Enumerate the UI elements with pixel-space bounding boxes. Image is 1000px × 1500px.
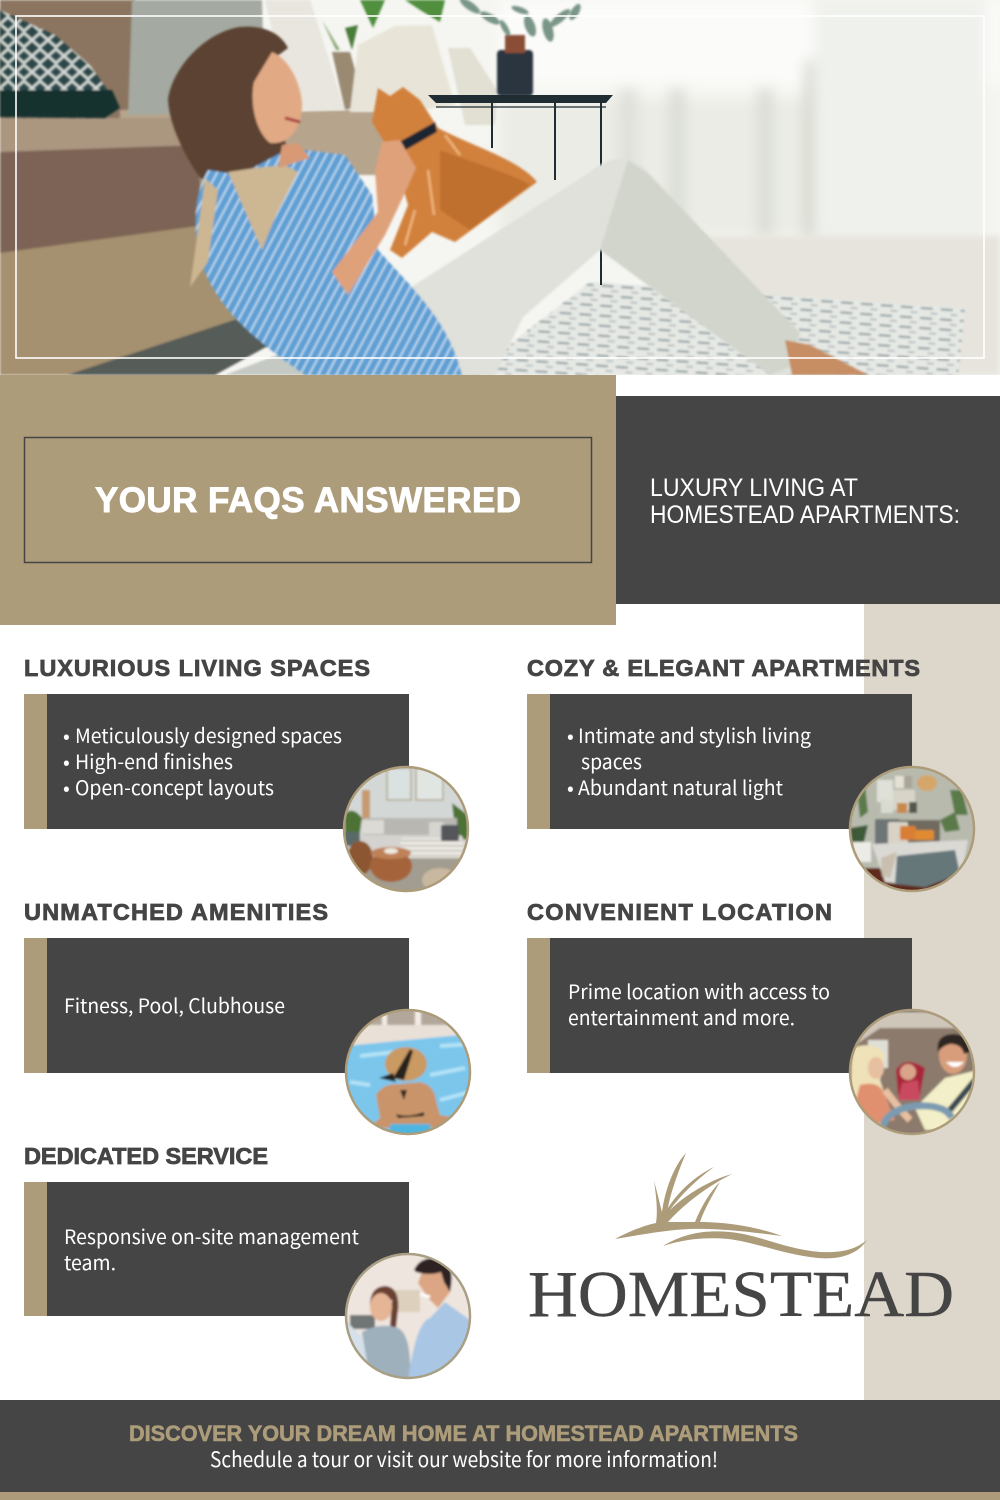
panel: cozy and elegant apartments: [527, 655, 980, 895]
pillows, blanket and plant: [0, 0, 497, 125]
panel: title band: [0, 375, 616, 625]
bullet list: spaces: [581, 746, 642, 775]
cat: [372, 87, 537, 258]
panel: dedicated service: [24, 1143, 471, 1385]
panel: unmatched amenities: [24, 899, 471, 1140]
logo wordmark: HOMESTEAD: [528, 1258, 954, 1331]
side table: [428, 95, 613, 285]
card: [24, 938, 409, 1073]
title: YOUR FAQS ANSWERED: [95, 481, 521, 520]
card: [24, 1182, 409, 1316]
bullet list: •: [567, 720, 574, 749]
card text: entertainment and more.: [568, 1002, 795, 1031]
hero photo: woman with cat on the living room floor: [0, 0, 1000, 375]
sofa: [0, 0, 410, 375]
heading: LUXURIOUS LIVING SPACES: [24, 655, 370, 681]
blonde hair: [190, 165, 298, 287]
panel: convenient location: [527, 899, 978, 1140]
photo: bedroom: [845, 765, 980, 895]
beige side column: [864, 604, 1000, 1400]
bullet list: •: [63, 772, 70, 801]
card text: Prime location with access to: [568, 976, 830, 1005]
footer band: [0, 1400, 1000, 1500]
bullet list: Intimate and stylish living: [578, 720, 811, 749]
white frame line: [16, 16, 984, 358]
photo: family in a car: [848, 1005, 978, 1140]
subtitle text: HOMESTEAD APARTMENTS:: [650, 501, 960, 529]
bullet list: High-end finishes: [75, 746, 233, 775]
back hair: [168, 27, 290, 182]
photo: couple: [345, 1250, 471, 1385]
heading: UNMATCHED AMENITIES: [24, 899, 328, 925]
heading: CONVENIENT LOCATION: [527, 899, 832, 925]
bullet list: Abundant natural light: [578, 772, 783, 801]
pants: [410, 159, 800, 375]
logo: Homestead: [528, 1153, 954, 1331]
vase and eucalyptus: [458, 0, 583, 96]
bullet list: •: [567, 772, 574, 801]
arm and hand: [332, 140, 416, 295]
card: [527, 938, 912, 1073]
card text: Responsive on-site management: [64, 1221, 359, 1250]
bullet list: •: [63, 720, 70, 749]
panel: subtitle: [616, 396, 1000, 604]
floor and rug: [690, 236, 1000, 375]
heading: DEDICATED SERVICE: [24, 1143, 268, 1169]
woman: [168, 27, 868, 375]
photo: pool: [345, 1005, 471, 1140]
card text: team.: [64, 1247, 116, 1276]
card text: Fitness, Pool, Clubhouse: [64, 990, 285, 1019]
footer heading: DISCOVER YOUR DREAM HOME AT HOMESTEAD APARTMENTS: [129, 1421, 798, 1446]
photo: living room: [340, 765, 472, 895]
bullet list: Open-concept layouts: [75, 772, 274, 801]
card: [527, 694, 912, 829]
subtitle text: LUXURY LIVING AT: [650, 474, 858, 502]
title frame: [24, 438, 592, 562]
panel: luxurious living spaces: [24, 655, 472, 895]
face: [253, 52, 302, 143]
heading: COZY & ELEGANT APARTMENTS: [527, 655, 920, 681]
bullet list: Meticulously designed spaces: [75, 720, 342, 749]
logo mark: grass and swooshes: [615, 1153, 867, 1258]
footer text: Schedule a tour or visit our website for more information!: [210, 1444, 718, 1474]
bullet list: •: [63, 746, 70, 775]
shirt: [196, 148, 462, 375]
card: [24, 694, 409, 829]
